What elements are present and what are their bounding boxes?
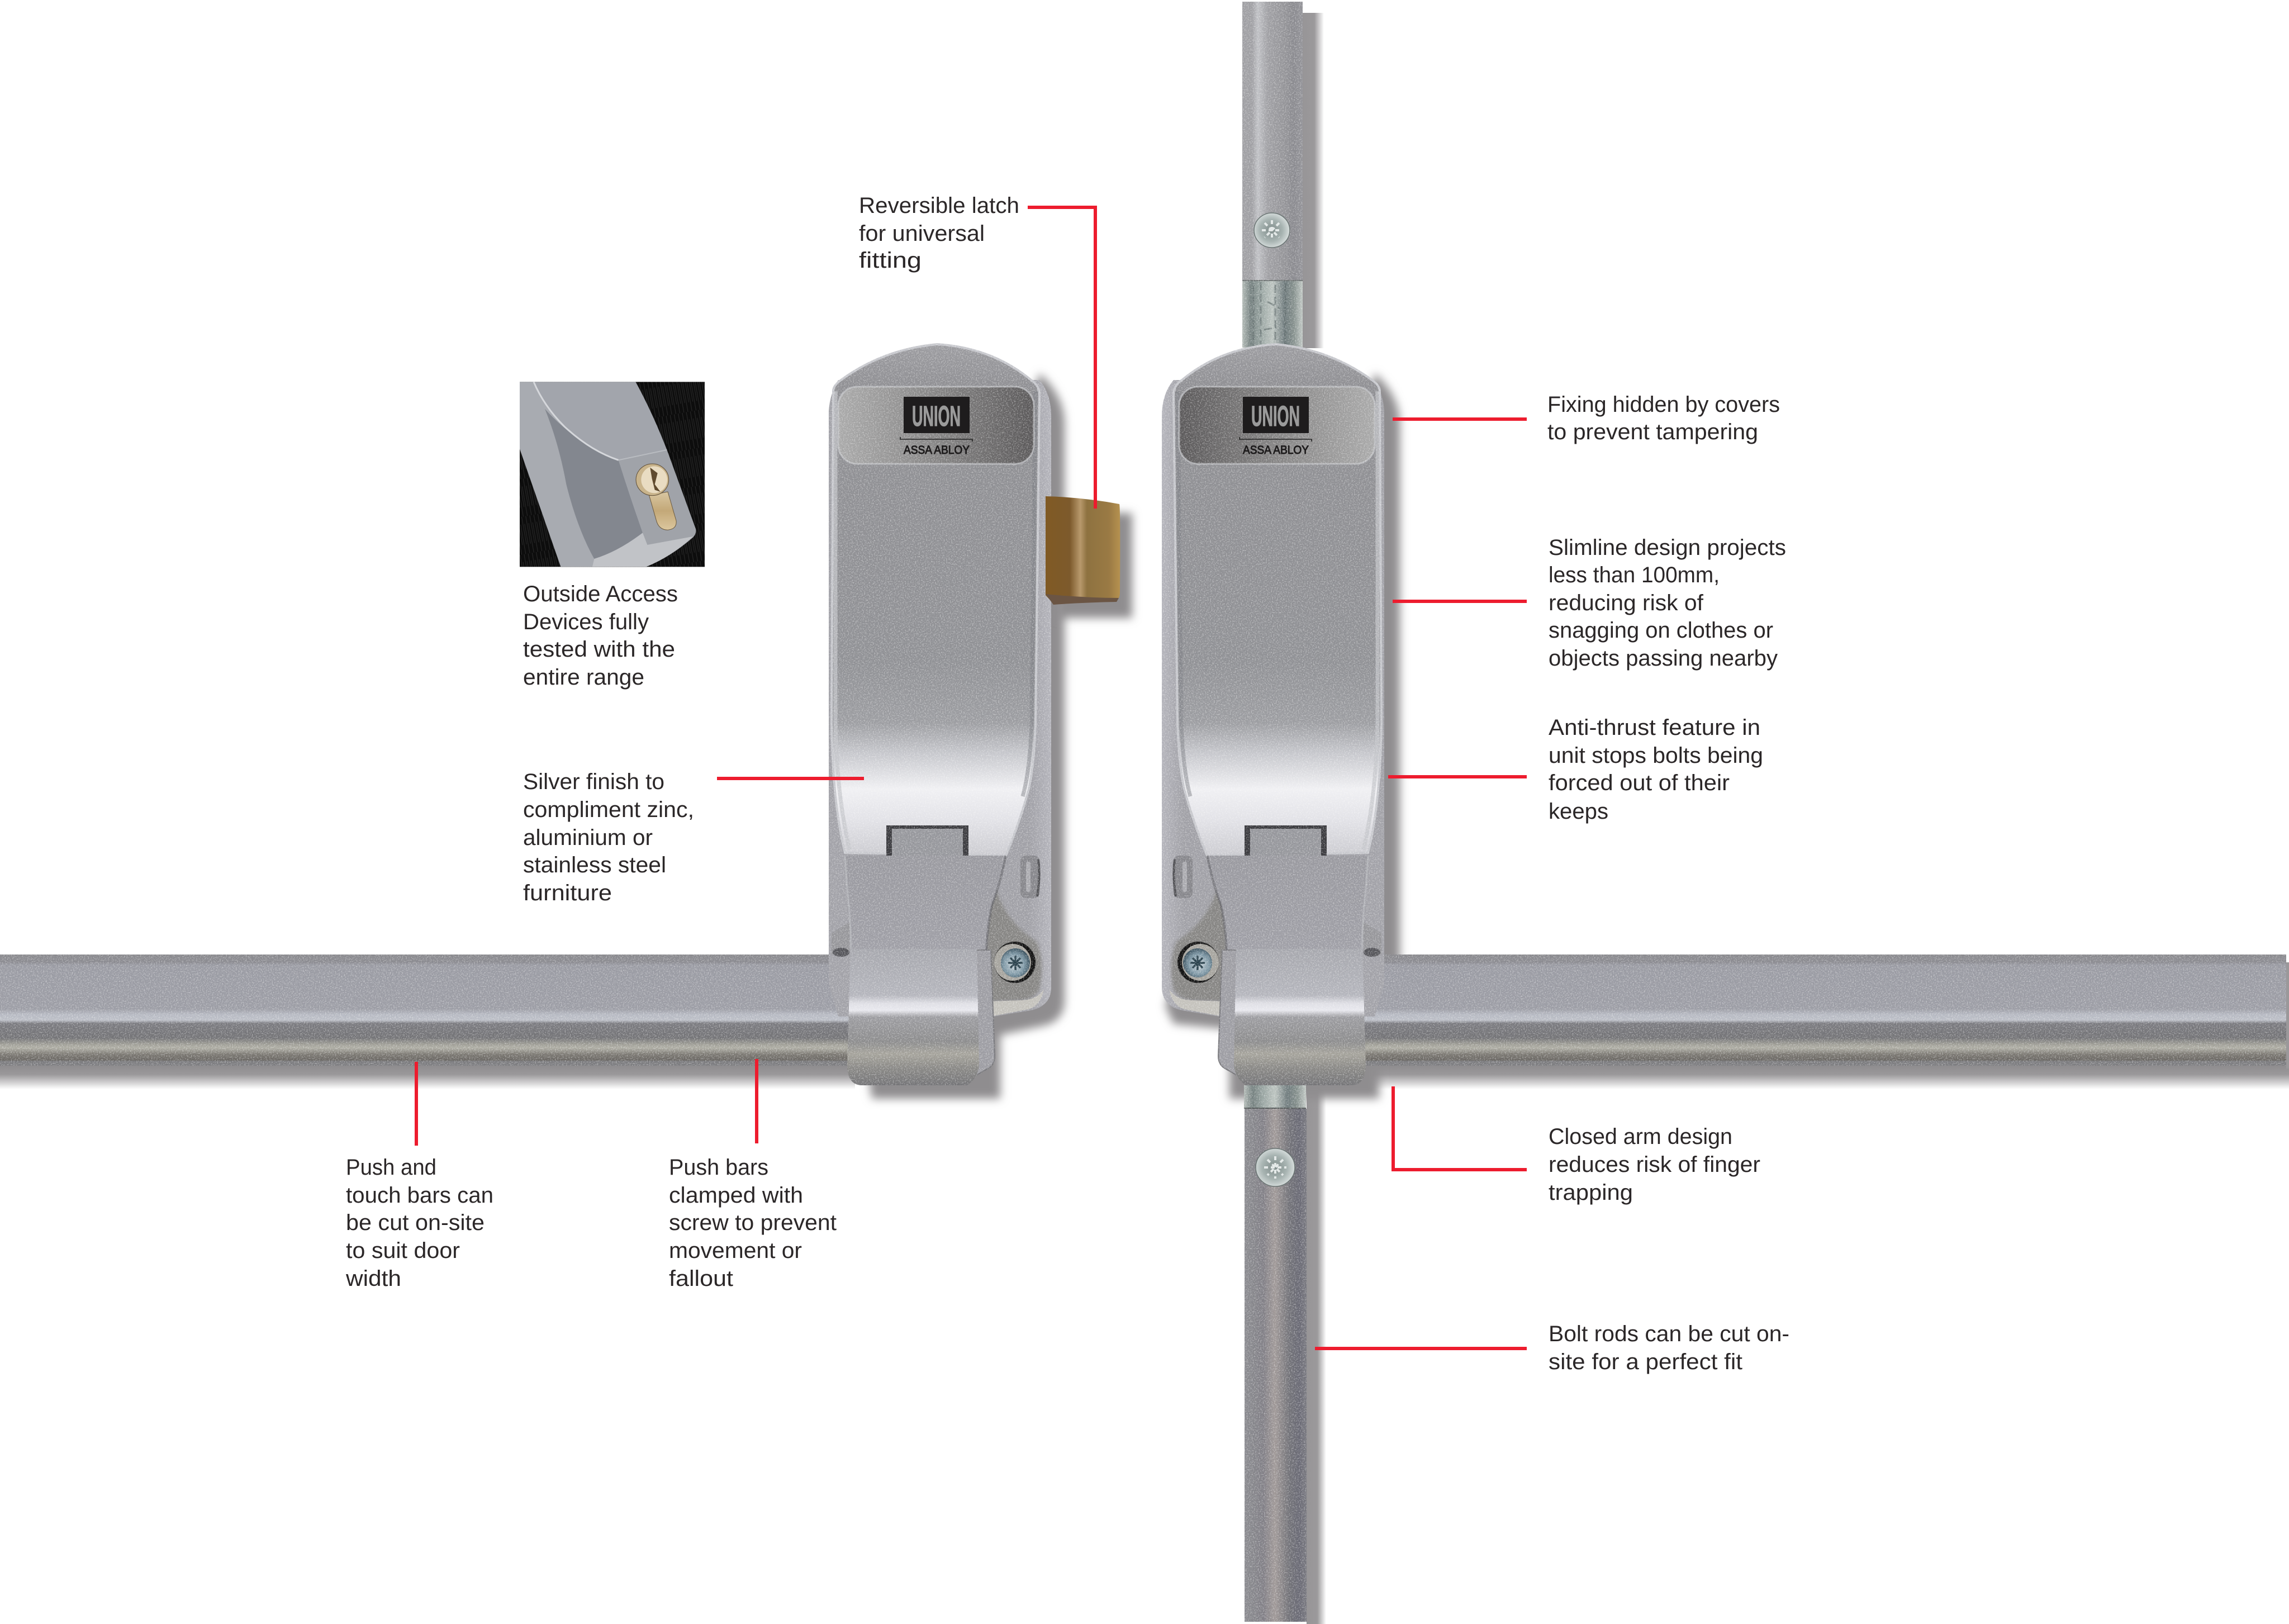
callout: closed arm design: [1393, 1086, 1760, 1205]
callout: silver finish: furniture: [523, 881, 612, 905]
callout: push and touch bars: [345, 1062, 493, 1291]
callout: push bars clamped: fallout: [669, 1266, 733, 1291]
text: outside access devices: entire range: [523, 665, 644, 690]
callout: anti-thrust: unit stops bolts being: [1549, 743, 1763, 768]
callout: closed arm design: trapping: [1549, 1180, 1633, 1205]
callout: slimline design: objects passing nearby: [1549, 646, 1778, 671]
callout: push bars clamped: clamped with: [669, 1183, 803, 1208]
callout: push and touch bars: width: [345, 1266, 401, 1291]
callout: silver finish: aluminium or: [523, 825, 653, 850]
callout: fixing hidden: Fixing hidden by covers: [1547, 392, 1780, 417]
left panic bolt unit: [829, 344, 1051, 1085]
callout: anti-thrust: keeps: [1549, 799, 1608, 824]
callout: silver finish: [523, 770, 864, 905]
callout: reversible latch: for universal: [859, 221, 985, 246]
callout: anti-thrust: Anti-thrust feature in: [1549, 715, 1760, 740]
callout: slimline design: snagging on clothes or: [1549, 618, 1773, 643]
callout: push bars clamped: screw to prevent: [669, 1210, 837, 1235]
screw on lower rod: [1256, 1148, 1295, 1186]
right panic bolt unit: [1162, 344, 1384, 1085]
text: outside access devices: Outside Access: [523, 582, 678, 606]
screw on upper rod: [1254, 213, 1290, 248]
callout: push and touch bars: Push and: [346, 1155, 436, 1180]
callout: bolt rods: [1315, 1322, 1789, 1374]
callout: push and touch bars: be cut on-site: [346, 1210, 485, 1235]
callout: push and touch bars: touch bars can: [346, 1183, 493, 1208]
callout: anti-thrust: [1388, 715, 1763, 824]
upper bolt rod: [1242, 2, 1303, 348]
text: outside access devices: Devices fully: [523, 610, 649, 634]
callout: slimline design: reducing risk of: [1549, 591, 1704, 615]
lower bolt rod: [1244, 1085, 1307, 1622]
right UNION ASSA ABLOY logo: UNION: [1251, 400, 1300, 432]
right push bar: [1358, 955, 2286, 1066]
callout: silver finish: compliment zinc,: [523, 797, 694, 822]
callout: push and touch bars: to suit door: [346, 1238, 460, 1263]
callout: reversible latch: [859, 193, 1095, 509]
text: outside access devices: [523, 582, 678, 690]
outside access device photo: [520, 382, 705, 567]
callout: push bars clamped: Push bars: [669, 1155, 768, 1180]
right UNION ASSA ABLOY logo: [1240, 397, 1312, 457]
callout: slimline design: Slimline design projects: [1549, 535, 1786, 560]
latch bolt: [1046, 496, 1120, 605]
callout: bolt rods: Bolt rods can be cut on-: [1549, 1322, 1789, 1346]
right UNION ASSA ABLOY logo: ASSA ABLOY: [1243, 444, 1309, 457]
text: outside access devices: tested with the: [523, 637, 675, 662]
callout: bolt rods: site for a perfect fit: [1549, 1350, 1742, 1374]
callout: push bars clamped: [669, 1059, 837, 1291]
callout: closed arm design: reduces risk of finger: [1549, 1152, 1760, 1177]
left push bar: [0, 955, 855, 1066]
callout: reversible latch: Reversible latch: [859, 193, 1019, 218]
left UNION ASSA ABLOY logo: [900, 397, 972, 457]
callout: silver finish: stainless steel: [523, 853, 666, 877]
callout: anti-thrust: forced out of their: [1549, 771, 1730, 795]
left UNION ASSA ABLOY logo: UNION: [912, 400, 961, 432]
callout: slimline design: less than 100mm,: [1549, 563, 1720, 587]
callout: push bars clamped: movement or: [669, 1238, 802, 1263]
callout: fixing hidden: to prevent tampering: [1547, 420, 1758, 444]
callout: closed arm design: Closed arm design: [1549, 1124, 1732, 1149]
callout: slimline design: [1393, 535, 1786, 671]
callout: silver finish: Silver finish to: [523, 770, 664, 794]
callout: fixing hidden: [1393, 392, 1780, 444]
left UNION ASSA ABLOY logo: ASSA ABLOY: [904, 444, 970, 457]
callout: reversible latch: fitting: [859, 248, 922, 273]
